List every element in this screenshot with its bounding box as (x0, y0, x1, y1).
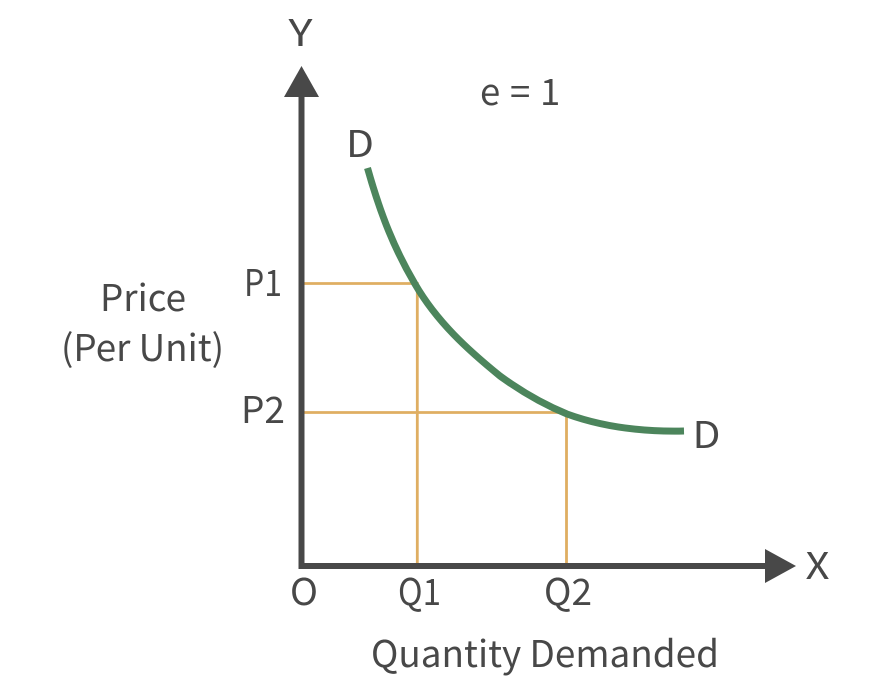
elasticity label: = (510, 63, 530, 116)
x axis with arrow (298, 549, 796, 583)
y axis title (61, 269, 224, 372)
y axis title: (Per Unit) (61, 319, 224, 372)
demand curve (368, 168, 684, 431)
axis label X: X (806, 537, 830, 590)
quantity label Q1: Q1 (398, 563, 441, 616)
x axis title: Quantity Demanded (371, 625, 719, 678)
origin label: O (290, 563, 318, 616)
price label P2: P2 (241, 381, 285, 434)
curve label D bottom: D (692, 406, 720, 459)
curve label D top: D (346, 115, 374, 168)
elasticity label: 1 (540, 63, 560, 116)
elasticity label: e (480, 63, 500, 116)
guide lines for P1, P2, Q1, Q2 (303, 284, 566, 564)
price label P1: P1 (244, 254, 282, 307)
y axis title: Price (100, 269, 186, 322)
y axis with arrow (284, 66, 319, 569)
quantity label Q2: Q2 (544, 563, 592, 616)
axis label Y: Y (287, 4, 313, 57)
